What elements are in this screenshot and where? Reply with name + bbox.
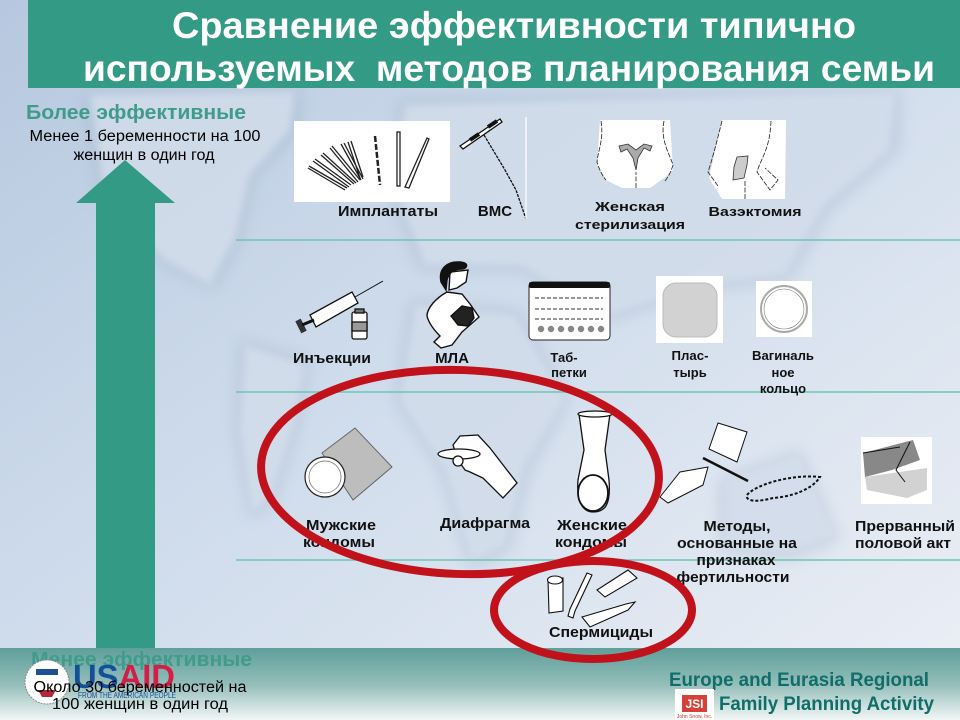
label: patch: Плас- — [672, 348, 708, 363]
icon: female sterilization — [597, 120, 673, 188]
label: pills — [550, 350, 587, 380]
icon: implants — [294, 121, 450, 202]
icon: vasectomy — [708, 120, 786, 199]
footer text: project name: Family Planning Activity — [719, 694, 934, 715]
icon: diaphragm — [438, 435, 517, 498]
title text line 2: используемых методов планирования семьи — [83, 48, 935, 89]
icon: female condom — [578, 411, 612, 512]
label: withdrawal: половой акт — [855, 535, 951, 552]
red ellipse: barrier methods — [258, 363, 662, 581]
label: fertility awareness methods: Методы, — [704, 518, 770, 535]
label: female condoms — [555, 517, 627, 551]
label: implants: Имплантаты — [338, 203, 438, 220]
label: diaphragm: Диафрагма — [440, 515, 531, 532]
label: vaginal ring: Вагиналь — [752, 348, 814, 363]
label: fertility awareness methods: основанные на — [677, 535, 798, 552]
label: female condoms: Женские — [556, 517, 627, 534]
label: patch — [672, 348, 708, 380]
label: female sterilization — [575, 199, 685, 232]
icon: pill pack — [529, 282, 610, 340]
logo: USAID: FROM THE AMERICAN PEOPLE — [78, 691, 176, 700]
footer band — [0, 648, 960, 720]
label: pills: петки — [551, 365, 587, 380]
label: male condoms: Мужские — [306, 517, 376, 534]
effectiveness arrow — [76, 160, 175, 650]
label: less effective: Менее эффективные — [31, 649, 252, 671]
label: male condoms — [303, 517, 376, 551]
label: female sterilization: Женская — [594, 199, 665, 214]
label: male condoms: кондомы — [303, 534, 375, 551]
label: injection: Инъекции — [293, 350, 371, 367]
icon: spermicides — [548, 570, 637, 627]
label: fertility awareness methods: признаках — [696, 552, 776, 569]
icon: injection — [298, 281, 383, 339]
note: fewer than 1 pregnancy: женщин в один год — [74, 147, 214, 164]
label: withdrawal — [855, 518, 955, 552]
icon: patch — [656, 276, 723, 343]
label: withdrawal: Прерванный — [855, 518, 955, 535]
logo: USAID: USAID — [73, 658, 175, 695]
label: vaginal ring — [752, 348, 814, 396]
title text line 1: Сравнение эффективности типично — [172, 5, 856, 46]
icon: male condom — [305, 428, 392, 500]
note: about 30 pregnancies — [34, 679, 247, 713]
label: vaginal ring: кольцо — [760, 381, 806, 396]
note: fewer than 1 pregnancy: Менее 1 беременности на 100 — [30, 128, 261, 145]
tier divider lines — [236, 240, 960, 560]
icon: IUD — [460, 117, 526, 219]
red ellipse: spermicides — [494, 561, 692, 659]
note: about 30 pregnancies: 100 женщин в один год — [52, 696, 228, 713]
logo: JSI — [675, 689, 714, 720]
title banner — [28, 0, 960, 88]
icon: withdrawal — [861, 437, 932, 504]
label: LAM: МЛА — [435, 350, 469, 367]
footer text: project name: Europe and Eurasia Regional — [669, 670, 929, 691]
note: fewer than 1 pregnancy — [30, 128, 261, 164]
icon: vaginal ring — [756, 281, 812, 337]
label: more effective: Более эффективные — [26, 102, 246, 124]
note: about 30 pregnancies: Около 30 беременностей на — [34, 679, 247, 696]
logo: JSI: JSI — [685, 697, 704, 711]
icon: breastfeeding mother — [427, 262, 479, 348]
label: IUD: ВМС — [478, 203, 512, 220]
footer text: project name — [669, 670, 934, 715]
icon: fertility awareness — [660, 423, 820, 503]
label: vasectomy: Вазэктомия — [708, 204, 802, 219]
label: fertility awareness methods: фертильности — [676, 569, 790, 586]
label: spermicides: Спермициды — [549, 624, 653, 641]
logo: USAID — [25, 658, 176, 704]
label: vaginal ring: ное — [771, 365, 795, 380]
label: female sterilization: стерилизация — [575, 217, 685, 232]
label: pills: Таб- — [550, 350, 578, 365]
label: patch: тырь — [673, 365, 707, 380]
logo: JSI: John Snow, Inc. — [677, 714, 712, 720]
label: fertility awareness methods — [676, 518, 798, 586]
label: female condoms: кондомы — [555, 534, 627, 551]
